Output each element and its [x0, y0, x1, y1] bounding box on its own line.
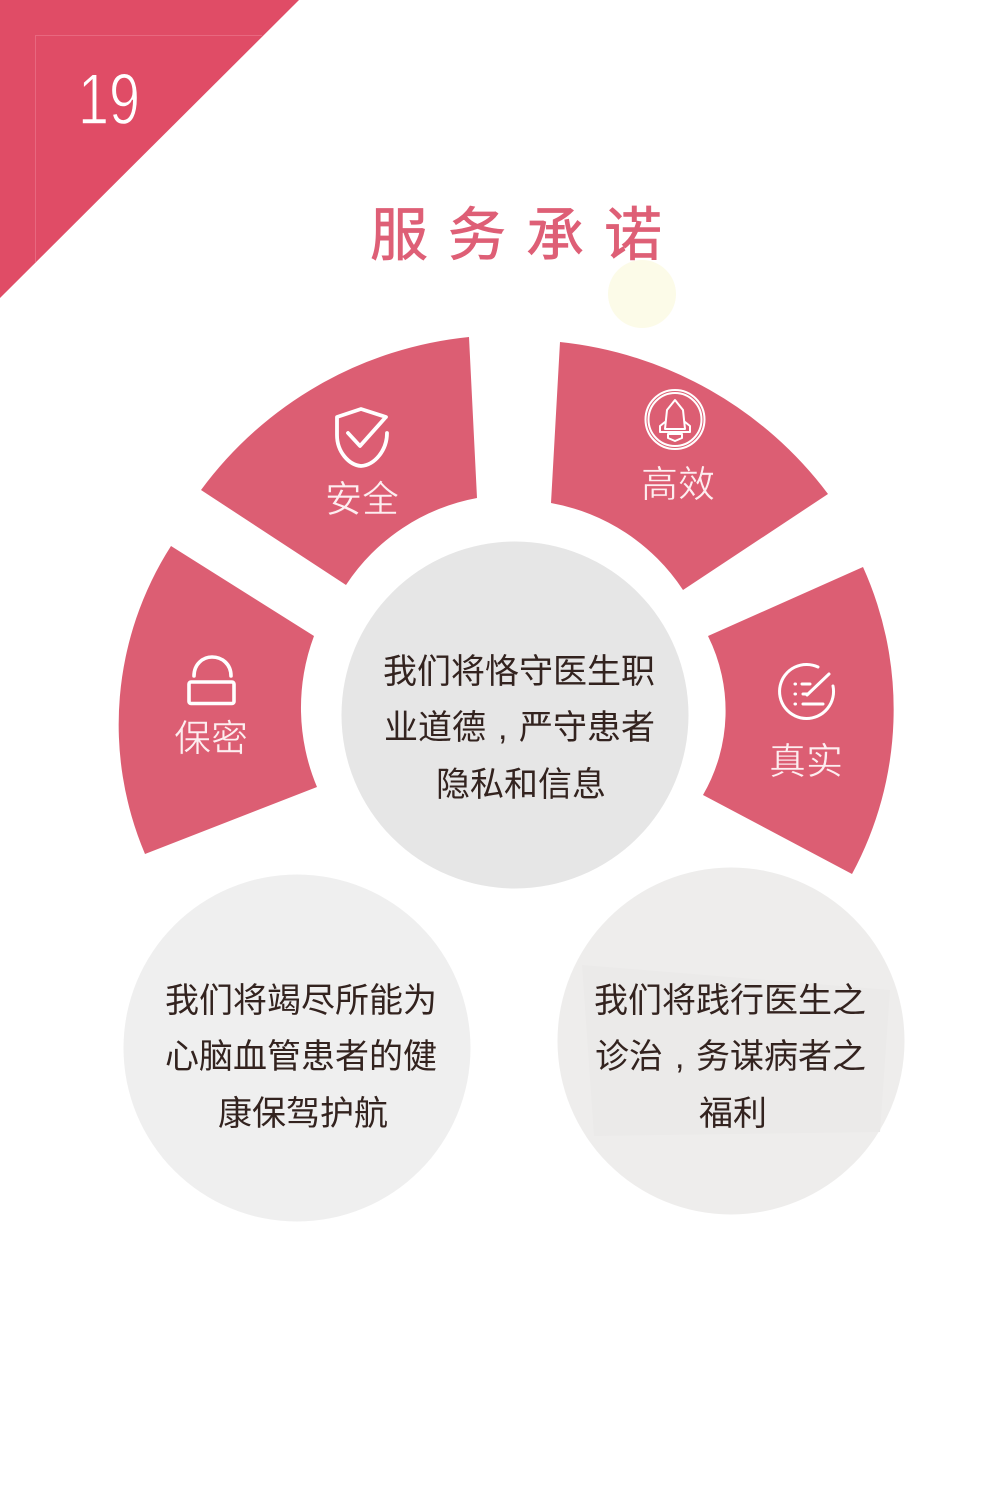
- label: 保密: 保密: [174, 718, 248, 759]
- center circle with text: 严守患者: [519, 709, 655, 747]
- right bottom circle with text: 诊治: [595, 1038, 663, 1076]
- label: 真实: 真实: [769, 741, 843, 782]
- title: 服务承诺: [370, 203, 682, 268]
- icon: rocket in circle: [646, 390, 704, 449]
- icon: checklist in circle: [780, 664, 834, 718]
- corner banner with page number: [0, 0, 299, 298]
- right bottom circle with text: 福利: [699, 1095, 767, 1133]
- icon: padlock: [189, 657, 234, 704]
- decorative pale yellow circle: [608, 260, 676, 328]
- wedge: 保密: [119, 546, 317, 854]
- center circle with text: 隐私和信息: [436, 766, 606, 804]
- left bottom circle with text: [124, 874, 470, 1222]
- right bottom circle with text: ,: [675, 1038, 684, 1076]
- label: 高效: 高效: [641, 464, 715, 505]
- right bottom circle with text: 务谋病者之: [696, 1038, 866, 1076]
- center circle with text: [342, 542, 688, 888]
- label: 安全: 安全: [325, 479, 399, 520]
- right bottom circle with text: [558, 868, 904, 1214]
- right bottom circle with text: 我们将践行医生之: [594, 982, 866, 1020]
- center circle with text: 业道德: [384, 709, 486, 747]
- wedge: 安全: [201, 337, 477, 585]
- center circle with text: 我们将恪守医生职: [383, 653, 655, 691]
- wedge: 高效: [551, 342, 828, 590]
- corner banner with page number: 19: [78, 60, 140, 140]
- icon: shield with check: [337, 409, 387, 466]
- center circle with text: ,: [498, 709, 507, 747]
- left bottom circle with text: 心脑血管患者的健: [165, 1038, 437, 1076]
- left bottom circle with text: 我们将竭尽所能为: [165, 982, 437, 1020]
- wedge: 真实: [703, 567, 894, 874]
- left bottom circle with text: 康保驾护航: [218, 1095, 388, 1133]
